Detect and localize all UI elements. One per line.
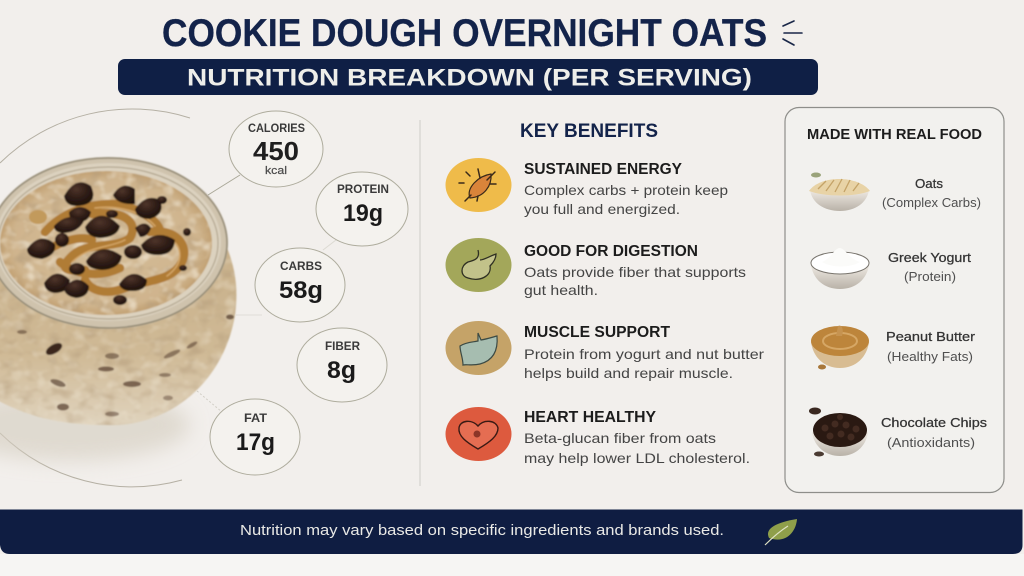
- panel: nutrition photo and stats: [0, 109, 408, 487]
- benefit: sustained energy: Complex carbs + protein keep: [524, 182, 728, 198]
- ingredient: greek yogurt: [811, 248, 972, 289]
- icon: title accent strokes: [783, 21, 802, 45]
- icon: energy: [446, 158, 512, 212]
- stat: calories: CALORIES: [248, 123, 305, 135]
- benefit: good for digestion: GOOD FOR DIGESTION: [524, 243, 698, 260]
- benefit: good for digestion: Oats provide fiber that supports: [524, 264, 746, 280]
- stat: protein: [316, 172, 408, 246]
- icon: bowl of chocolate chips: [809, 408, 868, 456]
- benefit: muscle support: helps build and repair muscle.: [524, 365, 733, 381]
- panel: key benefits: [446, 120, 764, 466]
- icon: heart: [446, 407, 512, 461]
- subtitle banner: [118, 59, 818, 95]
- oat flecks in jar: [17, 314, 234, 416]
- stat: calories: 450: [253, 138, 299, 166]
- icon: bowl of peanut butter: [811, 326, 869, 370]
- benefit: sustained energy: you full and energized.: [524, 201, 680, 217]
- chocolate chips: [27, 182, 191, 305]
- heading: key benefits: KEY BENEFITS: [520, 120, 658, 142]
- benefit: good for digestion: [446, 238, 746, 298]
- icon: bowl of yogurt: [811, 248, 869, 289]
- jar rim: [0, 157, 228, 329]
- benefit: heart healthy: HEART HEALTHY: [524, 409, 656, 426]
- stat: calories: [229, 111, 323, 187]
- oats surface: [0, 171, 212, 315]
- ingredient: peanut butter: Peanut Butter: [886, 330, 975, 344]
- ingredient: chocolate chips: Chocolate Chips: [881, 416, 987, 430]
- ingredient: chocolate chips: (Antioxidants): [887, 436, 975, 450]
- benefit: heart healthy: may help lower LDL cholesterol.: [524, 450, 750, 466]
- panel: made with real food: [785, 108, 1004, 492]
- stat: protein: PROTEIN: [337, 184, 389, 196]
- ingredient: oats: [809, 172, 981, 211]
- stat: protein: 19g: [343, 200, 383, 227]
- icon: muscle: [446, 321, 512, 375]
- stat: fat: 17g: [236, 429, 275, 456]
- stat: fat: [210, 399, 300, 475]
- stat: calories: kcal: [265, 165, 287, 177]
- icon: bowl of oats: [809, 172, 870, 211]
- benefit: heart healthy: Beta-glucan fiber from oats: [524, 430, 716, 446]
- stat: carbs: 58g: [279, 277, 323, 304]
- ingredient: chocolate chips: [809, 408, 987, 456]
- stat: fat: FAT: [244, 413, 267, 425]
- subtitle banner: NUTRITION BREAKDOWN (PER SERVING): [187, 64, 752, 92]
- footer bar: [0, 510, 1022, 554]
- ingredient: greek yogurt: Greek Yogurt: [888, 251, 972, 265]
- decorative arc around jar: [0, 109, 190, 487]
- benefit: heart healthy: [446, 407, 750, 466]
- ingredient: oats: Oats: [915, 176, 943, 191]
- icon: stomach: [446, 238, 512, 292]
- benefit: good for digestion: gut health.: [524, 282, 598, 298]
- peanut butter drizzle: [45, 204, 184, 292]
- benefit: sustained energy: [446, 158, 728, 217]
- heading: made with real food: MADE WITH REAL FOOD: [807, 127, 982, 143]
- benefit: sustained energy: SUSTAINED ENERGY: [524, 161, 682, 178]
- ingredient: peanut butter: [811, 326, 975, 370]
- stat: fiber: 8g: [327, 357, 356, 384]
- stat: carbs: [255, 248, 345, 322]
- stat: fiber: FIBER: [325, 341, 361, 353]
- icon: leaf: [765, 519, 797, 545]
- footer bar: Nutrition may vary based on specific ingredients and brands used.: [240, 522, 724, 539]
- benefit: muscle support: [446, 321, 764, 381]
- connector lines: [197, 175, 336, 412]
- jar photo: [0, 157, 244, 461]
- benefit: muscle support: Protein from yogurt and nut butter: [524, 346, 764, 362]
- ingredient: peanut butter: (Healthy Fats): [887, 350, 973, 364]
- benefit: muscle support: MUSCLE SUPPORT: [524, 324, 670, 341]
- jar body: [0, 245, 236, 425]
- ingredient: greek yogurt: (Protein): [904, 270, 956, 284]
- stat: carbs: CARBS: [280, 261, 322, 273]
- ingredient: oats: (Complex Carbs): [882, 196, 981, 210]
- stat: fiber: [297, 328, 387, 402]
- title: COOKIE DOUGH OVERNIGHT OATS: [162, 12, 767, 55]
